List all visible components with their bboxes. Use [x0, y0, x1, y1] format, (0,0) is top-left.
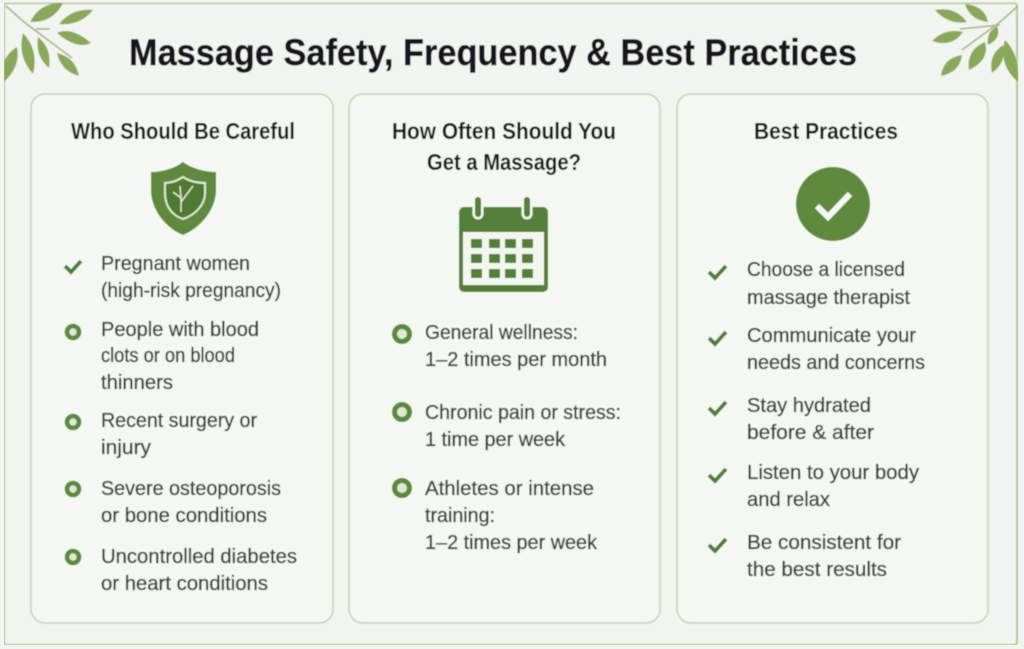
list item: blood clots: thinners: [101, 372, 173, 394]
panel: how often: [349, 94, 660, 623]
list item: listen: and relax: [747, 489, 830, 511]
list item: chronic pain: 1 time per week: [425, 429, 566, 451]
list item: recent surgery: [67, 410, 257, 459]
list item: licensed therapist: Choose a licensed: [747, 259, 905, 281]
leaves: top left: [4, 3, 93, 82]
list item: pregnant women: Pregnant women: [101, 253, 250, 275]
panel: who should be careful: [31, 94, 333, 623]
list item: pregnant women: [65, 253, 281, 302]
list item: hydrated: Stay hydrated: [747, 395, 871, 417]
list item: communicate: [709, 325, 925, 374]
list item: recent surgery: injury: [101, 437, 151, 459]
leaves: top right: [932, 4, 1018, 82]
icon: shield with leaf: [151, 162, 216, 235]
list item: listen: [709, 462, 919, 511]
list item: general wellness: [394, 322, 607, 371]
list item: severe osteoporosis: Severe osteoporosis: [101, 478, 281, 500]
list item: uncontrolled diabetes: or heart conditions: [101, 573, 268, 595]
list item: chronic pain: [394, 402, 621, 451]
list item: communicate: needs and concerns: [747, 352, 925, 374]
list item: hydrated: before & after: [747, 422, 874, 444]
list item: severe osteoporosis: [67, 478, 281, 527]
icon: check circle: [796, 167, 870, 241]
list item: blood clots: People with blood: [101, 319, 259, 341]
list item: licensed therapist: [709, 259, 910, 309]
list item: athletes: Athletes or intense: [425, 478, 594, 500]
list item: uncontrolled diabetes: Uncontrolled diabetes: [101, 546, 297, 568]
heading: how often: [392, 118, 616, 175]
list item: hydrated: [709, 395, 874, 444]
list item: licensed therapist: massage therapist: [747, 287, 910, 309]
list item: chronic pain: Chronic pain or stress:: [425, 402, 621, 424]
list item: consistent: Be consistent for: [747, 532, 901, 554]
list item: severe osteoporosis: or bone conditions: [101, 505, 267, 527]
list item: athletes: [394, 478, 598, 554]
panel: best practices: [677, 94, 988, 623]
list item: recent surgery: Recent surgery or: [101, 410, 257, 432]
list item: uncontrolled diabetes: [67, 546, 297, 595]
list item: athletes: 1–2 times per week: [425, 532, 598, 554]
list item: blood clots: clots or on blood: [101, 345, 235, 367]
list item: consistent: [709, 532, 901, 581]
heading: how often: Get a Massage?: [427, 149, 581, 175]
list item: communicate: Communicate your: [747, 325, 916, 347]
heading: who should be careful: Who Should Be Careful: [71, 118, 295, 144]
list item: general wellness: General wellness:: [425, 322, 578, 344]
heading: how often: How Often Should You: [392, 118, 616, 144]
list item: pregnant women: (high-risk pregnancy): [101, 280, 281, 302]
icon: calendar: [459, 200, 548, 292]
list item: listen: Listen to your body: [747, 462, 919, 484]
list item: blood clots: [67, 319, 259, 394]
heading: best practices: Best Practices: [754, 118, 898, 144]
title: Massage Safety, Frequency & Best Practices: [129, 32, 857, 73]
list item: general wellness: 1–2 times per month: [425, 349, 607, 371]
list item: athletes: training:: [425, 505, 495, 527]
list item: consistent: the best results: [747, 559, 887, 581]
